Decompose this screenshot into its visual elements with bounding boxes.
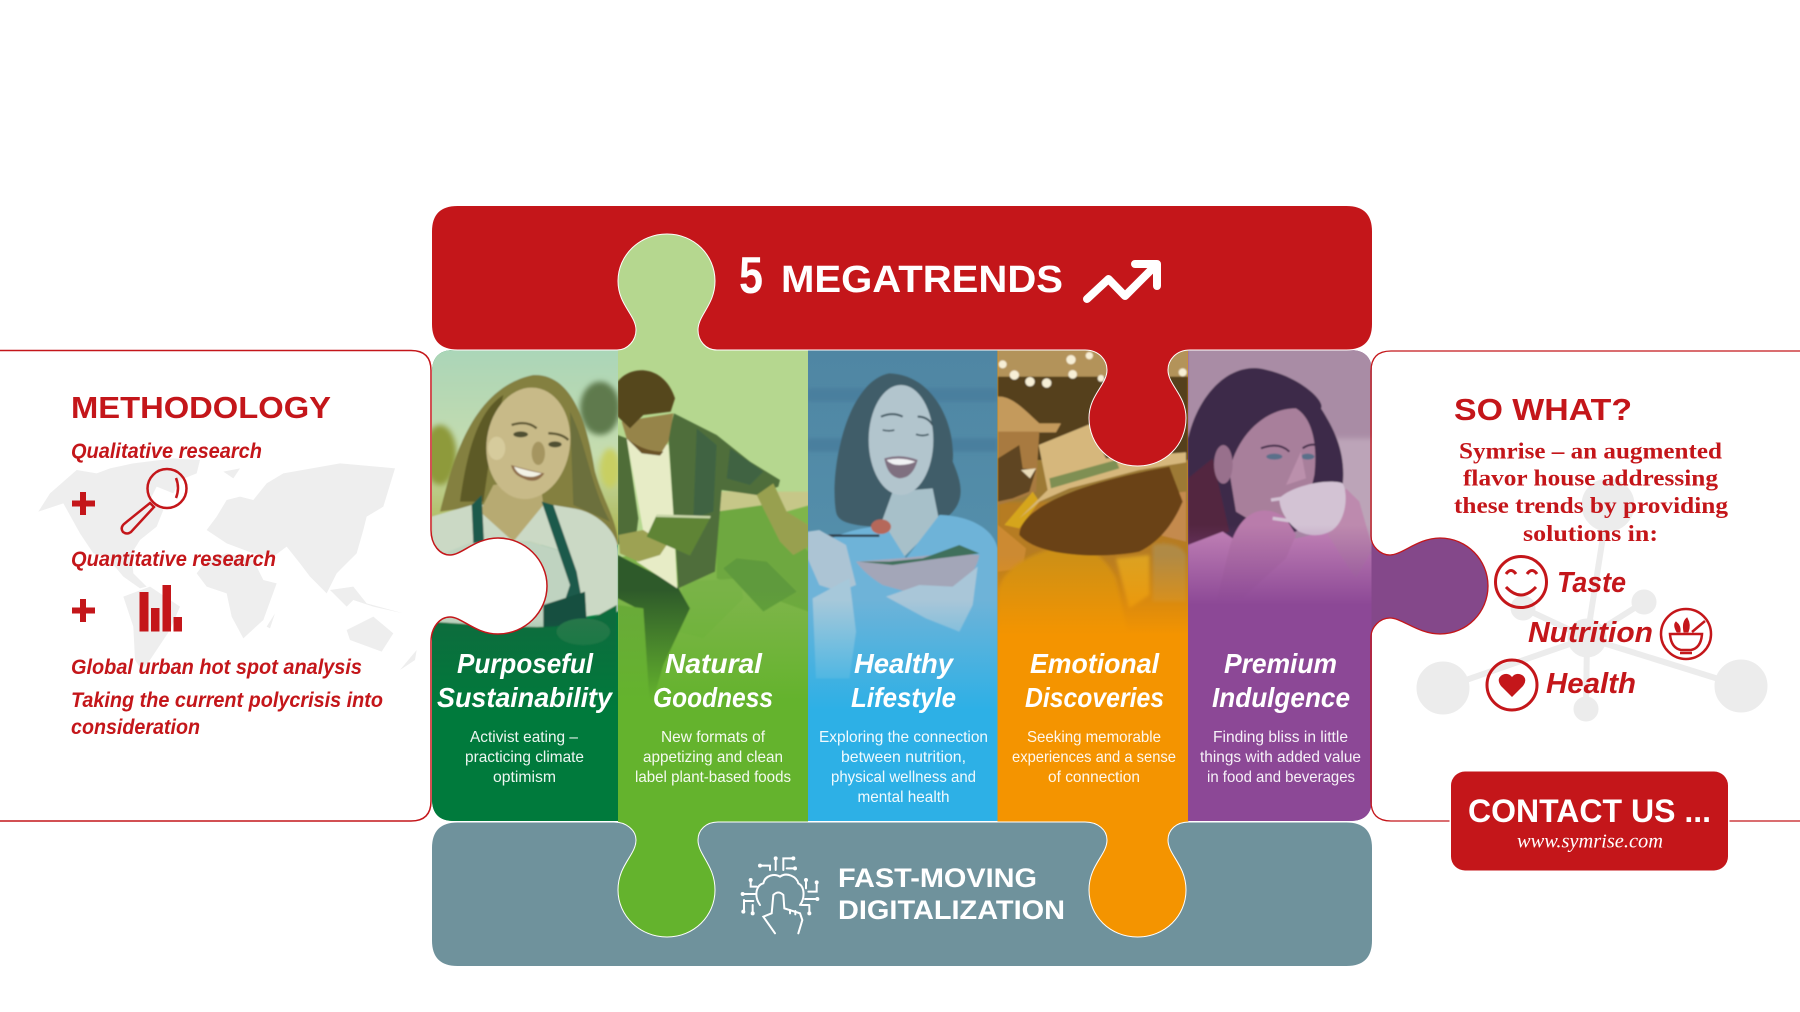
text: healthy lifestyle bbox=[819, 648, 988, 806]
notch cut-out bbox=[420, 530, 547, 642]
photo column: healthy lifestyle bbox=[808, 350, 998, 821]
panel: 5 megatrends bbox=[432, 206, 1372, 466]
text: emotional discoveries: experiences and a sense bbox=[1012, 749, 1176, 766]
icon: brain and hand bbox=[741, 856, 819, 933]
text: natural goodness bbox=[635, 648, 791, 786]
panel: methodology bbox=[0, 350, 547, 821]
icon: rising arrow bbox=[1087, 264, 1157, 299]
text: emotional discoveries: of connection bbox=[1048, 769, 1140, 786]
panel: fast-moving digitalization bbox=[432, 822, 1372, 966]
text: nutrition: Nutrition bbox=[1528, 617, 1653, 649]
purple tab bbox=[1372, 536, 1488, 637]
photo column: purposeful sustainability bbox=[423, 345, 620, 821]
panel: so what bbox=[1371, 351, 1800, 821]
text: symrise statement: flavor house addressing bbox=[1463, 466, 1719, 490]
plus icon bbox=[72, 599, 95, 622]
text: premium indulgence: Indulgence bbox=[1212, 682, 1350, 713]
text: symrise statement: these trends by providing bbox=[1454, 493, 1729, 518]
text: healthy lifestyle: Exploring the connection bbox=[819, 729, 988, 746]
text: premium indulgence: Finding bliss in little bbox=[1213, 729, 1348, 746]
icon: smiley bbox=[1496, 556, 1546, 608]
text: healthy lifestyle: mental health bbox=[858, 789, 950, 806]
text: health: Health bbox=[1546, 668, 1636, 700]
icon: magnifier bbox=[122, 469, 186, 534]
text: emotional discoveries bbox=[1012, 648, 1176, 786]
text: purposeful sustainability: Activist eating – bbox=[470, 729, 578, 746]
text: premium indulgence: Premium bbox=[1224, 648, 1337, 679]
text: natural goodness: appetizing and clean bbox=[643, 749, 783, 766]
text: natural goodness: New formats of bbox=[661, 729, 766, 746]
text: taste: Taste bbox=[1557, 567, 1626, 599]
text: symrise statement bbox=[1454, 438, 1729, 546]
text: qualitative research: Qualitative research bbox=[71, 440, 262, 463]
text: healthy lifestyle: between nutrition, bbox=[841, 749, 966, 766]
callout: contact us bbox=[1450, 772, 1730, 870]
text: polycrisis: Taking the current polycrisis into bbox=[71, 689, 383, 712]
photo column: emotional discoveries bbox=[998, 345, 1188, 938]
text: natural goodness: label plant-based foods bbox=[635, 769, 791, 786]
text: emotional discoveries: Seeking memorable bbox=[1027, 729, 1161, 746]
callout: contact us: www.symrise.com bbox=[1517, 830, 1663, 852]
text: polycrisis bbox=[71, 689, 383, 739]
heading: 5 megatrends: MEGATRENDS bbox=[781, 259, 1063, 301]
text: symrise statement: Symrise – an augmented bbox=[1459, 438, 1722, 464]
world map background bbox=[38, 458, 417, 670]
text: healthy lifestyle: Healthy bbox=[854, 648, 954, 679]
plus icon bbox=[72, 492, 95, 515]
photo column: natural goodness bbox=[618, 234, 810, 938]
callout: contact us: CONTACT US ... bbox=[1468, 793, 1711, 829]
text: premium indulgence bbox=[1200, 648, 1361, 786]
text: emotional discoveries: Discoveries bbox=[1025, 682, 1164, 713]
icon: heart bbox=[1487, 660, 1537, 710]
molecule background bbox=[1417, 479, 1767, 721]
text: premium indulgence: things with added value bbox=[1200, 749, 1361, 766]
text: emotional discoveries: Emotional bbox=[1030, 648, 1160, 679]
text: natural goodness: Goodness bbox=[653, 682, 773, 713]
icon: mortar bowl bbox=[1661, 609, 1711, 659]
text: purposeful sustainability: Purposeful bbox=[457, 648, 594, 679]
text: natural goodness: Natural bbox=[665, 648, 763, 679]
text: global urban hot spot analysis: Global urban hot spot analysis bbox=[71, 656, 362, 679]
heading: so what: SO WHAT? bbox=[1454, 392, 1632, 427]
text: purposeful sustainability bbox=[437, 648, 613, 786]
heading: methodology: METHODOLOGY bbox=[71, 390, 331, 425]
text: purposeful sustainability: Sustainability bbox=[437, 682, 613, 713]
text: premium indulgence: in food and beverages bbox=[1207, 769, 1355, 786]
text: purposeful sustainability: optimism bbox=[493, 769, 556, 786]
heading: 5 megatrends bbox=[739, 247, 1063, 305]
text: healthy lifestyle: physical wellness and bbox=[831, 769, 976, 786]
heading: fast-moving digitalization: DIGITALIZATION bbox=[838, 895, 1065, 925]
heading: fast-moving digitalization bbox=[838, 863, 1065, 925]
heading: fast-moving digitalization: FAST-MOVING bbox=[838, 863, 1037, 893]
text: quantitative research: Quantitative research bbox=[71, 548, 276, 571]
photo column: premium indulgence bbox=[1188, 345, 1383, 821]
text: polycrisis: consideration bbox=[71, 716, 200, 739]
icon: bar chart bbox=[140, 585, 182, 632]
text: healthy lifestyle: Lifestyle bbox=[851, 682, 956, 713]
heading: 5 megatrends: 5 bbox=[739, 247, 763, 305]
text: symrise statement: solutions in: bbox=[1523, 521, 1658, 546]
panel border bbox=[1371, 351, 1800, 821]
text: purposeful sustainability: practicing climate bbox=[465, 749, 584, 766]
panel outline bbox=[0, 350, 547, 821]
